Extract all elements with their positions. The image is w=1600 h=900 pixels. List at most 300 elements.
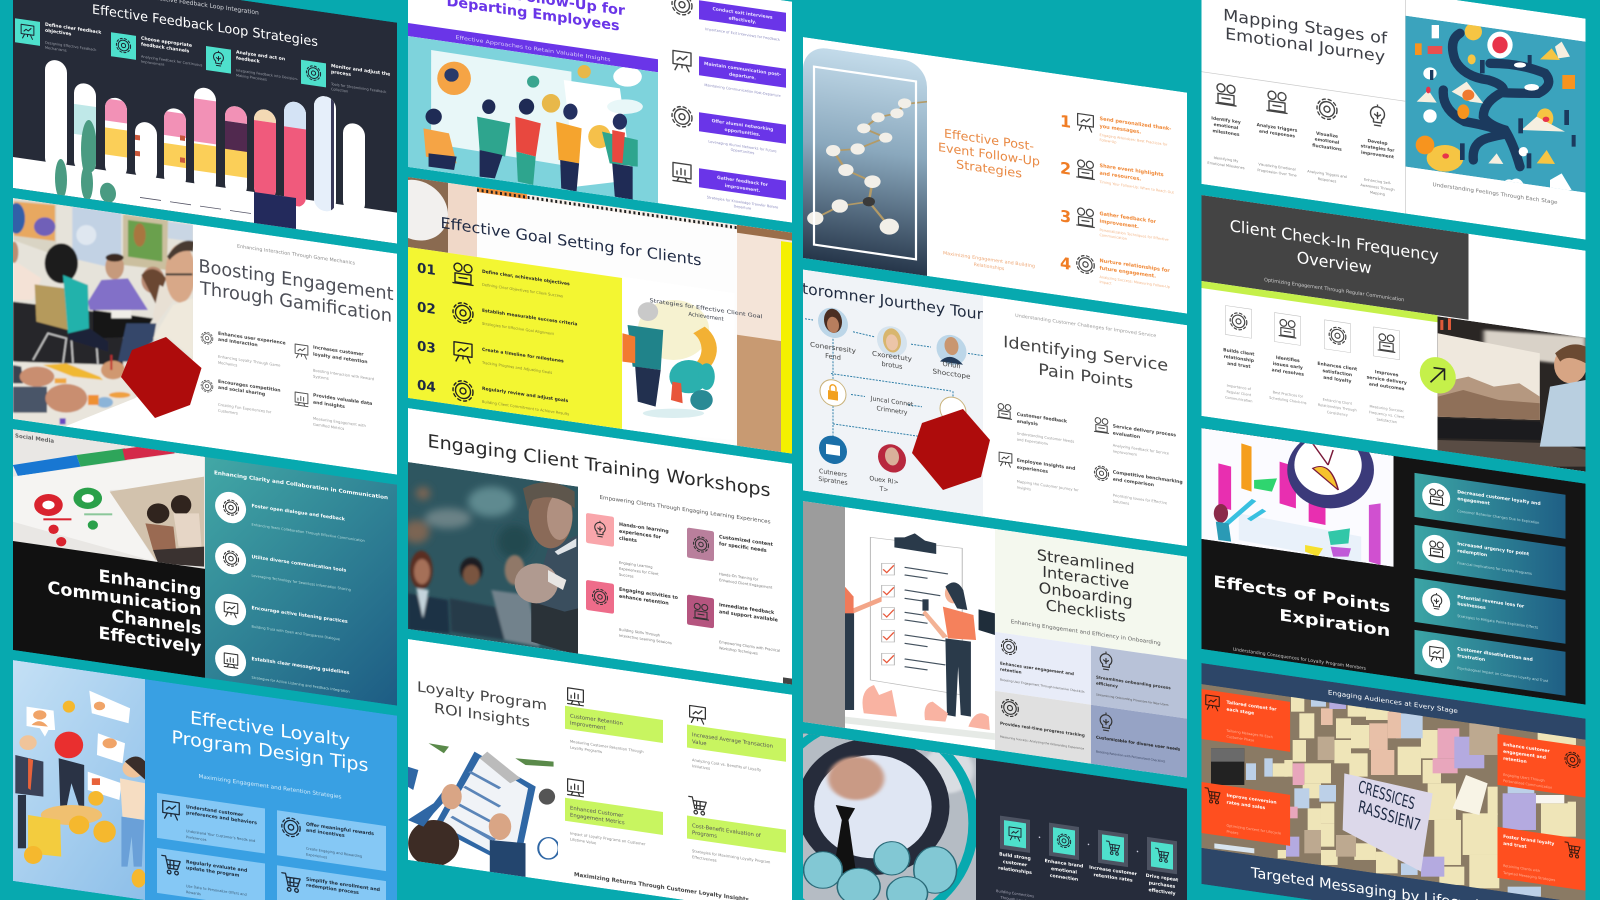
bottom nodes bbox=[819, 378, 966, 483]
metric 4: Cost-Benefit Evaluation of bbox=[692, 823, 761, 839]
step 4: Nurture relationships for bbox=[1100, 258, 1170, 274]
metric 1: Improvement bbox=[570, 721, 606, 732]
connectors bbox=[805, 319, 983, 458]
title: Checklists bbox=[1046, 596, 1126, 626]
pain point 4: Solutions bbox=[1113, 499, 1129, 506]
metric 2: Increased Average Transaction bbox=[692, 732, 773, 750]
title: Overview bbox=[1297, 248, 1372, 278]
workshop card 3: Interactive Learning Sessions bbox=[619, 634, 672, 645]
cell 2 bbox=[1091, 646, 1187, 719]
subtitle: Achievement bbox=[688, 312, 724, 323]
action 3: Opportunities bbox=[731, 148, 755, 155]
workshop card 1: Hands-on learning bbox=[619, 522, 669, 535]
step 4: Analyzing Success: Measuring Follow-Up bbox=[1100, 275, 1171, 289]
caption: Understanding Feelings Through Each Stage bbox=[1432, 182, 1558, 206]
frequency 2 bbox=[1269, 312, 1307, 405]
step 3: Personalization Techniques for Effective bbox=[1100, 228, 1169, 242]
workshop card 2: Enhanced Client Engagement bbox=[719, 578, 773, 590]
benefit 1 bbox=[200, 332, 286, 367]
tip 2: Create Engaging and Rewarding bbox=[306, 846, 362, 859]
orange card 3 bbox=[1498, 734, 1586, 798]
white base band bbox=[13, 157, 397, 244]
benefit 4: and insights bbox=[313, 400, 345, 410]
goal 2 bbox=[417, 296, 577, 340]
frequency 1: and trust bbox=[1227, 361, 1251, 370]
goal 2: Strategies for Effective Goal Alignment bbox=[482, 322, 554, 336]
tip 2: Offer meaningful rewards bbox=[306, 822, 374, 837]
slide: boosting engagement through gamification bbox=[13, 198, 397, 474]
bottom labels: Cutneers bbox=[819, 468, 847, 479]
goal 1: 01 bbox=[417, 260, 436, 279]
slide: post-event follow-up bbox=[803, 37, 1187, 314]
cell 4: Boosting Retention with Personalized Checklists bbox=[1096, 749, 1166, 764]
title: Effective Post- bbox=[944, 127, 1034, 153]
item 3: feedback bbox=[236, 55, 261, 65]
point 1 bbox=[215, 490, 365, 543]
yellow side bar bbox=[781, 241, 792, 454]
orange card 3: Personalized Communication bbox=[1503, 779, 1552, 790]
frequency 1: Importance of bbox=[1227, 384, 1252, 391]
slide: client check-in frequency bbox=[1202, 195, 1587, 488]
benefit 3: Customers bbox=[218, 409, 238, 416]
title: Mapping Stages of bbox=[1223, 5, 1387, 48]
banner bbox=[408, 23, 658, 72]
dots bbox=[1039, 836, 1138, 852]
dashboard label: Social Media bbox=[15, 433, 54, 445]
point 2: Leveraging Technology for Seamless Information Sharing bbox=[252, 574, 351, 592]
panel heading: Enhancing Clarity and Collaboration in Communication bbox=[214, 470, 388, 501]
sign text: RASSSIEN7 bbox=[1357, 797, 1422, 836]
bottom labels: Sipratnes bbox=[818, 476, 848, 487]
step 3: Increase customer bbox=[1089, 865, 1138, 878]
accent strip bbox=[1202, 281, 1438, 322]
orange card 2: rates and sales bbox=[1226, 800, 1265, 811]
stage 4: Mapping bbox=[1370, 190, 1385, 197]
benefit 1: Mechanics bbox=[218, 361, 237, 368]
slide: loyalty program design tips bbox=[13, 660, 397, 900]
bottom labels: T> bbox=[879, 485, 888, 494]
metric 4: Effectiveness bbox=[692, 855, 717, 863]
illustration: goal achievement bbox=[622, 277, 735, 440]
slide: dark customer relationships bbox=[764, 689, 1187, 900]
orange card 2: Phases bbox=[1226, 830, 1239, 835]
benefit 2 bbox=[294, 344, 374, 380]
slide: effective goal setting bbox=[384, 174, 792, 465]
step 2: and resources. bbox=[1100, 171, 1141, 183]
benefit 4: Measuring Engagement with bbox=[313, 417, 366, 428]
person legs bbox=[254, 192, 296, 229]
tip 1: preferences and behaviors bbox=[186, 810, 257, 826]
metric 1 bbox=[565, 687, 663, 763]
dashes bbox=[140, 197, 251, 214]
photo: milestone chain bbox=[803, 45, 928, 276]
pain point 2: Improvement bbox=[1113, 449, 1138, 457]
subtitle: Strategies for Effective Client Goal bbox=[650, 298, 763, 320]
title: Communication bbox=[48, 578, 202, 620]
title: Event Follow-Up bbox=[938, 140, 1040, 169]
frequency 4: Measuring Success: bbox=[1369, 404, 1404, 413]
goal 2: Establish measurable success criteria bbox=[482, 308, 577, 328]
photo: social media dashboard bbox=[13, 429, 205, 569]
frequency 2: Scheduling Check-Ins bbox=[1269, 396, 1307, 405]
benefit 3: Encourages competition bbox=[218, 379, 281, 394]
cell 2: Streamlines onboarding process bbox=[1096, 675, 1171, 690]
step 2: 2 bbox=[1060, 158, 1071, 179]
effect 4 bbox=[1414, 630, 1566, 696]
cell 3: Measuring Success: Analyzing the Onboarding Experience bbox=[1000, 735, 1084, 751]
step 3: retention rates bbox=[1093, 872, 1133, 884]
workshop card 1: Success bbox=[619, 573, 634, 579]
workshop card 1: experiences for bbox=[619, 529, 662, 541]
goal 4 bbox=[417, 374, 569, 416]
tip 3: Regularly evaluate and bbox=[186, 859, 247, 874]
diagram title: toromner Jourthey Tour bbox=[802, 279, 984, 324]
photo: sticky note wall bbox=[1202, 641, 1586, 900]
cell 4: Customizable for diverse user needs bbox=[1096, 735, 1181, 752]
stage 3: fluctuations bbox=[1312, 143, 1342, 153]
title: Onboarding bbox=[1039, 579, 1133, 610]
gray strip bbox=[803, 501, 845, 728]
item 1 bbox=[15, 18, 102, 52]
slide: feedback loop strategies bbox=[13, 0, 397, 248]
title: Effective Loyalty bbox=[190, 708, 350, 752]
yellow overlay bbox=[408, 247, 622, 429]
frequency 3: satisfaction bbox=[1322, 368, 1352, 378]
frequency 1: relationship bbox=[1224, 354, 1255, 364]
subtitle: Understanding Customer Challenges for Improved Service bbox=[1015, 313, 1156, 339]
heading: Engaging Audiences at Every Stage bbox=[1328, 689, 1458, 715]
cell 1: Boosting User Engagement Through Interactive Checklists bbox=[1000, 678, 1085, 694]
frequency 3 bbox=[1317, 319, 1358, 419]
benefit 4: Gamified Metrics bbox=[313, 423, 344, 431]
metric 2 bbox=[687, 705, 786, 782]
journey diagram bbox=[802, 269, 984, 517]
benefit 2: Systems bbox=[313, 375, 329, 381]
step 4: purchases bbox=[1149, 880, 1175, 890]
stage 3: emotional bbox=[1315, 136, 1340, 146]
banner: Effective Approaches to Retain Valuable Insights bbox=[456, 35, 611, 63]
orange card 3: retention bbox=[1503, 756, 1527, 765]
action 2: Maintaining Communication Post-Departure bbox=[704, 83, 781, 98]
cell 3 bbox=[995, 691, 1091, 764]
orange card 3: Enhance customer bbox=[1503, 742, 1551, 755]
title: Loyalty Program bbox=[417, 679, 547, 714]
pain point 4 bbox=[1094, 465, 1183, 514]
avatar labels: Cxoreetuty bbox=[872, 350, 912, 363]
item 1: Designing Effective Feedback bbox=[45, 41, 97, 52]
effect 2 bbox=[1414, 525, 1566, 591]
effect 3: businesses bbox=[1457, 601, 1486, 611]
workshop card 3 bbox=[586, 580, 679, 646]
effect 4: Psychological Impact on Customer Loyalty and Trust bbox=[1457, 666, 1549, 683]
action 3: opportunities. bbox=[724, 127, 761, 138]
item 1: objectives bbox=[45, 28, 72, 37]
step 4: future engagement. bbox=[1100, 266, 1156, 280]
workshop card 2: Hands-On Training for bbox=[719, 572, 759, 582]
slide: targeted messaging by lifecycle bbox=[1202, 641, 1586, 900]
tip 2: Experiences bbox=[306, 852, 327, 860]
step 3 bbox=[1089, 828, 1138, 885]
cell 1 bbox=[995, 632, 1091, 705]
centre label: Juncal Connet bbox=[870, 395, 914, 409]
point 1: Foster open dialogue and feedback bbox=[252, 503, 346, 523]
stage 1: Emotional Milestones bbox=[1207, 161, 1245, 170]
frequency 4: Satisfaction bbox=[1376, 417, 1397, 424]
item 4 bbox=[301, 60, 390, 94]
title: Strategies bbox=[956, 157, 1022, 181]
effect 1: Consumer Behavior Changes Due to Expiration bbox=[1457, 509, 1539, 525]
corner tab bbox=[783, 677, 792, 685]
metric 4: Programs bbox=[692, 830, 717, 840]
point 3: Encourage active listening practices bbox=[252, 605, 348, 625]
frequency 1: Communication bbox=[1225, 395, 1253, 403]
avatar labels: brotus bbox=[882, 360, 903, 371]
item 2: Choose appropriate bbox=[141, 36, 192, 49]
frequency 1: Builds client bbox=[1223, 347, 1255, 358]
pain point 2: Analyzing Feedback for Service bbox=[1113, 443, 1170, 456]
benefit 3: and social sharing bbox=[218, 385, 265, 398]
stage 1: emotional bbox=[1214, 122, 1239, 131]
stage 1: Identify key bbox=[1211, 115, 1241, 126]
goal 4: 04 bbox=[417, 377, 436, 396]
step 2: Timing Your Follow-Up: When to Reach Out bbox=[1099, 180, 1175, 195]
slide: enhancing communication channels bbox=[13, 429, 397, 706]
metric 3: Engagement Metrics bbox=[570, 813, 625, 826]
point 4 bbox=[215, 643, 350, 694]
frequency 3: and loyalty bbox=[1323, 375, 1351, 385]
step 3: 3 bbox=[1060, 206, 1071, 227]
avatar labels: Conersresity bbox=[810, 341, 856, 355]
tip 4 bbox=[277, 865, 386, 900]
stage 2 bbox=[1257, 89, 1298, 178]
photo: workshop table bbox=[13, 198, 193, 445]
slide: client training workshops bbox=[403, 407, 792, 711]
bottom labels: Ouex Rl> bbox=[869, 475, 899, 486]
sign text bbox=[1357, 777, 1422, 837]
title: Effective Feedback Loop Strategies bbox=[92, 3, 318, 50]
header panel bbox=[1202, 195, 1468, 320]
metric 2: Value bbox=[692, 739, 707, 747]
cell 2: efficiency bbox=[1096, 681, 1118, 689]
item 2: feedback channels bbox=[141, 42, 190, 55]
avatar labels: Orluh bbox=[942, 360, 961, 370]
benefit 4 bbox=[294, 392, 372, 430]
item 4: Collection bbox=[331, 87, 348, 94]
subtitle: Maximizing Engagement and Building bbox=[943, 250, 1035, 270]
benefit 3 bbox=[200, 380, 280, 414]
action 4 bbox=[673, 162, 786, 216]
action 2 bbox=[673, 50, 786, 99]
frequency 4: and outcomes bbox=[1369, 381, 1405, 392]
stage 3: Analyzing Triggers and bbox=[1307, 169, 1347, 179]
cell 4 bbox=[1091, 705, 1187, 778]
step 2: Share event highlights bbox=[1100, 163, 1164, 178]
title: Emotional Journey bbox=[1225, 24, 1386, 66]
workshop card 3: Engaging activities to bbox=[619, 587, 679, 601]
metric 4: Strategies for Maximizing Loyalty Program bbox=[692, 849, 771, 865]
action 4: Gather feedback for bbox=[717, 175, 769, 188]
step 1: Build strong bbox=[999, 851, 1031, 862]
benefit 4: Provides valuable data bbox=[313, 393, 372, 407]
point 4: Establish clear messaging guidelines bbox=[252, 656, 350, 676]
goal 3: Create a timeline for milestones bbox=[482, 347, 564, 365]
frequency 3: Relationships Through bbox=[1318, 403, 1357, 412]
metric 3: Enhanced Customer bbox=[570, 806, 624, 819]
effect 4: Customer dissatisfaction and bbox=[1457, 646, 1533, 663]
workshop card 4 bbox=[687, 594, 780, 659]
stage 1 bbox=[1207, 82, 1245, 170]
tip 3: Rewards bbox=[186, 890, 201, 896]
orange card 1: each stage bbox=[1226, 707, 1254, 717]
orange card 1 bbox=[1202, 689, 1290, 752]
tip 2 bbox=[277, 810, 386, 871]
subtitle: Empowering Clients Through Engaging Learning Experiences bbox=[600, 495, 771, 526]
item 4: Tools for Streamlining Feedback bbox=[330, 82, 387, 94]
plant bbox=[55, 159, 116, 202]
step 1: customer bbox=[1003, 859, 1028, 869]
step 3: improvement. bbox=[1100, 219, 1139, 230]
step 1: Follow-Up bbox=[1100, 138, 1117, 145]
action 1: Importance of Exit Interviews for Feedback bbox=[705, 27, 781, 42]
tip 1 bbox=[157, 793, 265, 854]
workshop card 2: for specific needs bbox=[719, 541, 767, 554]
item 4: process bbox=[331, 69, 351, 78]
benefit 3: Creating Fun Experiences for bbox=[218, 403, 272, 415]
pain point 3: Mapping the Customer Journey for bbox=[1017, 480, 1079, 493]
centre label: Crimnetry bbox=[877, 405, 908, 417]
metric 2: Analyzing Cost vs. Benefits of Loyalty bbox=[692, 758, 762, 772]
frequency 2: and resolves bbox=[1272, 367, 1304, 378]
goal 3 bbox=[417, 336, 564, 377]
metric 1: Measuring Customer Retention Through bbox=[570, 740, 644, 754]
effect 4: frustration bbox=[1457, 653, 1485, 663]
photo: circular portrait bbox=[764, 689, 979, 900]
stage 4: strategies for bbox=[1361, 143, 1395, 154]
orange card 4 bbox=[1498, 827, 1586, 891]
orange card 4: Foster brand loyalty bbox=[1503, 834, 1554, 847]
tip 1: Understand customer bbox=[186, 804, 244, 818]
slide: follow-up for departing employees bbox=[408, 0, 792, 222]
frequency 4: Frequency vs. Client bbox=[1369, 410, 1405, 419]
title: Effectively bbox=[98, 623, 202, 658]
action 3 bbox=[672, 105, 786, 160]
item 3: Making Processes bbox=[236, 73, 267, 82]
illustration: team meeting bbox=[408, 16, 658, 234]
workshop card 4: Workshop Techniques bbox=[719, 646, 758, 656]
step 1: relationships bbox=[998, 865, 1032, 876]
frequency 2: Best Practices for bbox=[1273, 390, 1304, 399]
cell 2: Streamlining Onboarding Processes for New Users bbox=[1096, 692, 1169, 707]
item 3 bbox=[206, 46, 298, 81]
step 1: Send personalized thank- bbox=[1100, 116, 1171, 132]
goal 1 bbox=[417, 257, 570, 299]
effect 1 bbox=[1414, 473, 1566, 539]
frequency 3: Enhances client bbox=[1317, 361, 1358, 373]
item 2 bbox=[111, 32, 202, 66]
step 1 bbox=[996, 815, 1034, 900]
title: Expiration bbox=[1279, 605, 1390, 640]
title: Enhancing bbox=[98, 566, 201, 601]
pain point 2 bbox=[1094, 417, 1176, 463]
step 4: 4 bbox=[1060, 253, 1071, 274]
frequency 3: Enhancing Client bbox=[1323, 398, 1353, 406]
subtitle: Understanding Consequences for Loyalty Program Members bbox=[1233, 647, 1367, 672]
step 4: Impact bbox=[1100, 280, 1112, 286]
photo: clipboard review bbox=[408, 721, 559, 900]
frequency 1 bbox=[1223, 305, 1255, 404]
step 1: Building Connections bbox=[996, 889, 1034, 898]
title: ROI Insights bbox=[434, 701, 530, 731]
effect 3: Potential revenue loss for bbox=[1457, 594, 1525, 610]
workshop card 2 bbox=[687, 527, 774, 590]
title: Channels bbox=[111, 606, 201, 639]
pain point 4: and comparison bbox=[1113, 476, 1154, 488]
step 2 bbox=[1045, 822, 1083, 884]
title: Streamlined bbox=[1037, 546, 1135, 578]
pain point 1: Understanding Customer Needs bbox=[1017, 432, 1074, 444]
effect 1: engagement bbox=[1457, 496, 1490, 507]
step 1: you messages. bbox=[1100, 124, 1141, 136]
red hexagon overlay 2 bbox=[912, 409, 990, 490]
cell 3: Provides real-time progress tracking bbox=[1000, 721, 1085, 738]
metric 3: Impact of Loyalty Programs on Customer bbox=[570, 832, 646, 846]
collage background bbox=[384, 174, 792, 454]
step 1: Engaging Attendees: Best Practices for bbox=[1100, 133, 1168, 147]
workshop card 2: Customized content bbox=[719, 534, 774, 548]
action 2: departure. bbox=[729, 72, 756, 81]
workshop card 4: and support available bbox=[719, 609, 779, 624]
benefit 2: loyalty and retention bbox=[313, 352, 368, 365]
sign text: CRESSICES bbox=[1357, 777, 1416, 814]
step 4 bbox=[1060, 252, 1171, 294]
metric 4 bbox=[687, 796, 786, 873]
photo: presenter pointing bbox=[403, 456, 578, 680]
title: Program Design Tips bbox=[172, 727, 368, 777]
title: Boosting Engagement bbox=[199, 256, 394, 305]
cell 1: retention bbox=[1000, 667, 1022, 675]
point 3 bbox=[215, 592, 348, 643]
title: Client Check-In Frequency bbox=[1230, 216, 1439, 265]
effect 1: Decreased customer loyalty and bbox=[1457, 489, 1541, 507]
metric 1: Loyalty Programs bbox=[570, 746, 602, 754]
stage 4 bbox=[1360, 102, 1395, 198]
slide: mapping emotional journey bbox=[1202, 0, 1586, 240]
action 2: Maintain communication post- bbox=[704, 61, 781, 78]
workshop card 4: Empowering Clients with Practical bbox=[719, 640, 780, 653]
frequency 4: Improves bbox=[1375, 369, 1399, 379]
workshop card 4: Immediate feedback bbox=[719, 602, 775, 616]
tip 1: Understand Your Customer's Needs and bbox=[186, 829, 255, 843]
stage 3: Visualize bbox=[1316, 131, 1338, 140]
slide: identifying service pain points bbox=[802, 269, 1187, 546]
point 4: Strategies for Active Listening and Feedback Integration bbox=[252, 676, 350, 694]
item 4: Monitor and adjust the bbox=[331, 63, 390, 78]
frequency 3: Consistency bbox=[1327, 410, 1348, 417]
item 3: Analyze and act on bbox=[236, 49, 285, 62]
benefit 1: Enhances user experience bbox=[218, 331, 286, 347]
goal 4: Building Client Commitment to Achieve Results bbox=[482, 400, 569, 416]
slide: effects of points expiration bbox=[1202, 406, 1586, 705]
stage 1: Identifying My bbox=[1214, 156, 1238, 163]
subtitle: Optimizing Engagement Through Regular Communication bbox=[1264, 277, 1404, 303]
frequency 2: Identifies bbox=[1276, 355, 1300, 364]
workshop card 3: enhance retention bbox=[619, 594, 669, 607]
workshop card 1: Experiences for Client bbox=[619, 567, 659, 576]
pain point 3: Employee insights and bbox=[1017, 458, 1075, 472]
pain point 2: evaluation bbox=[1113, 430, 1140, 440]
title: Pain Points bbox=[1038, 360, 1133, 392]
illustration: charts and clock bbox=[1202, 406, 1394, 591]
